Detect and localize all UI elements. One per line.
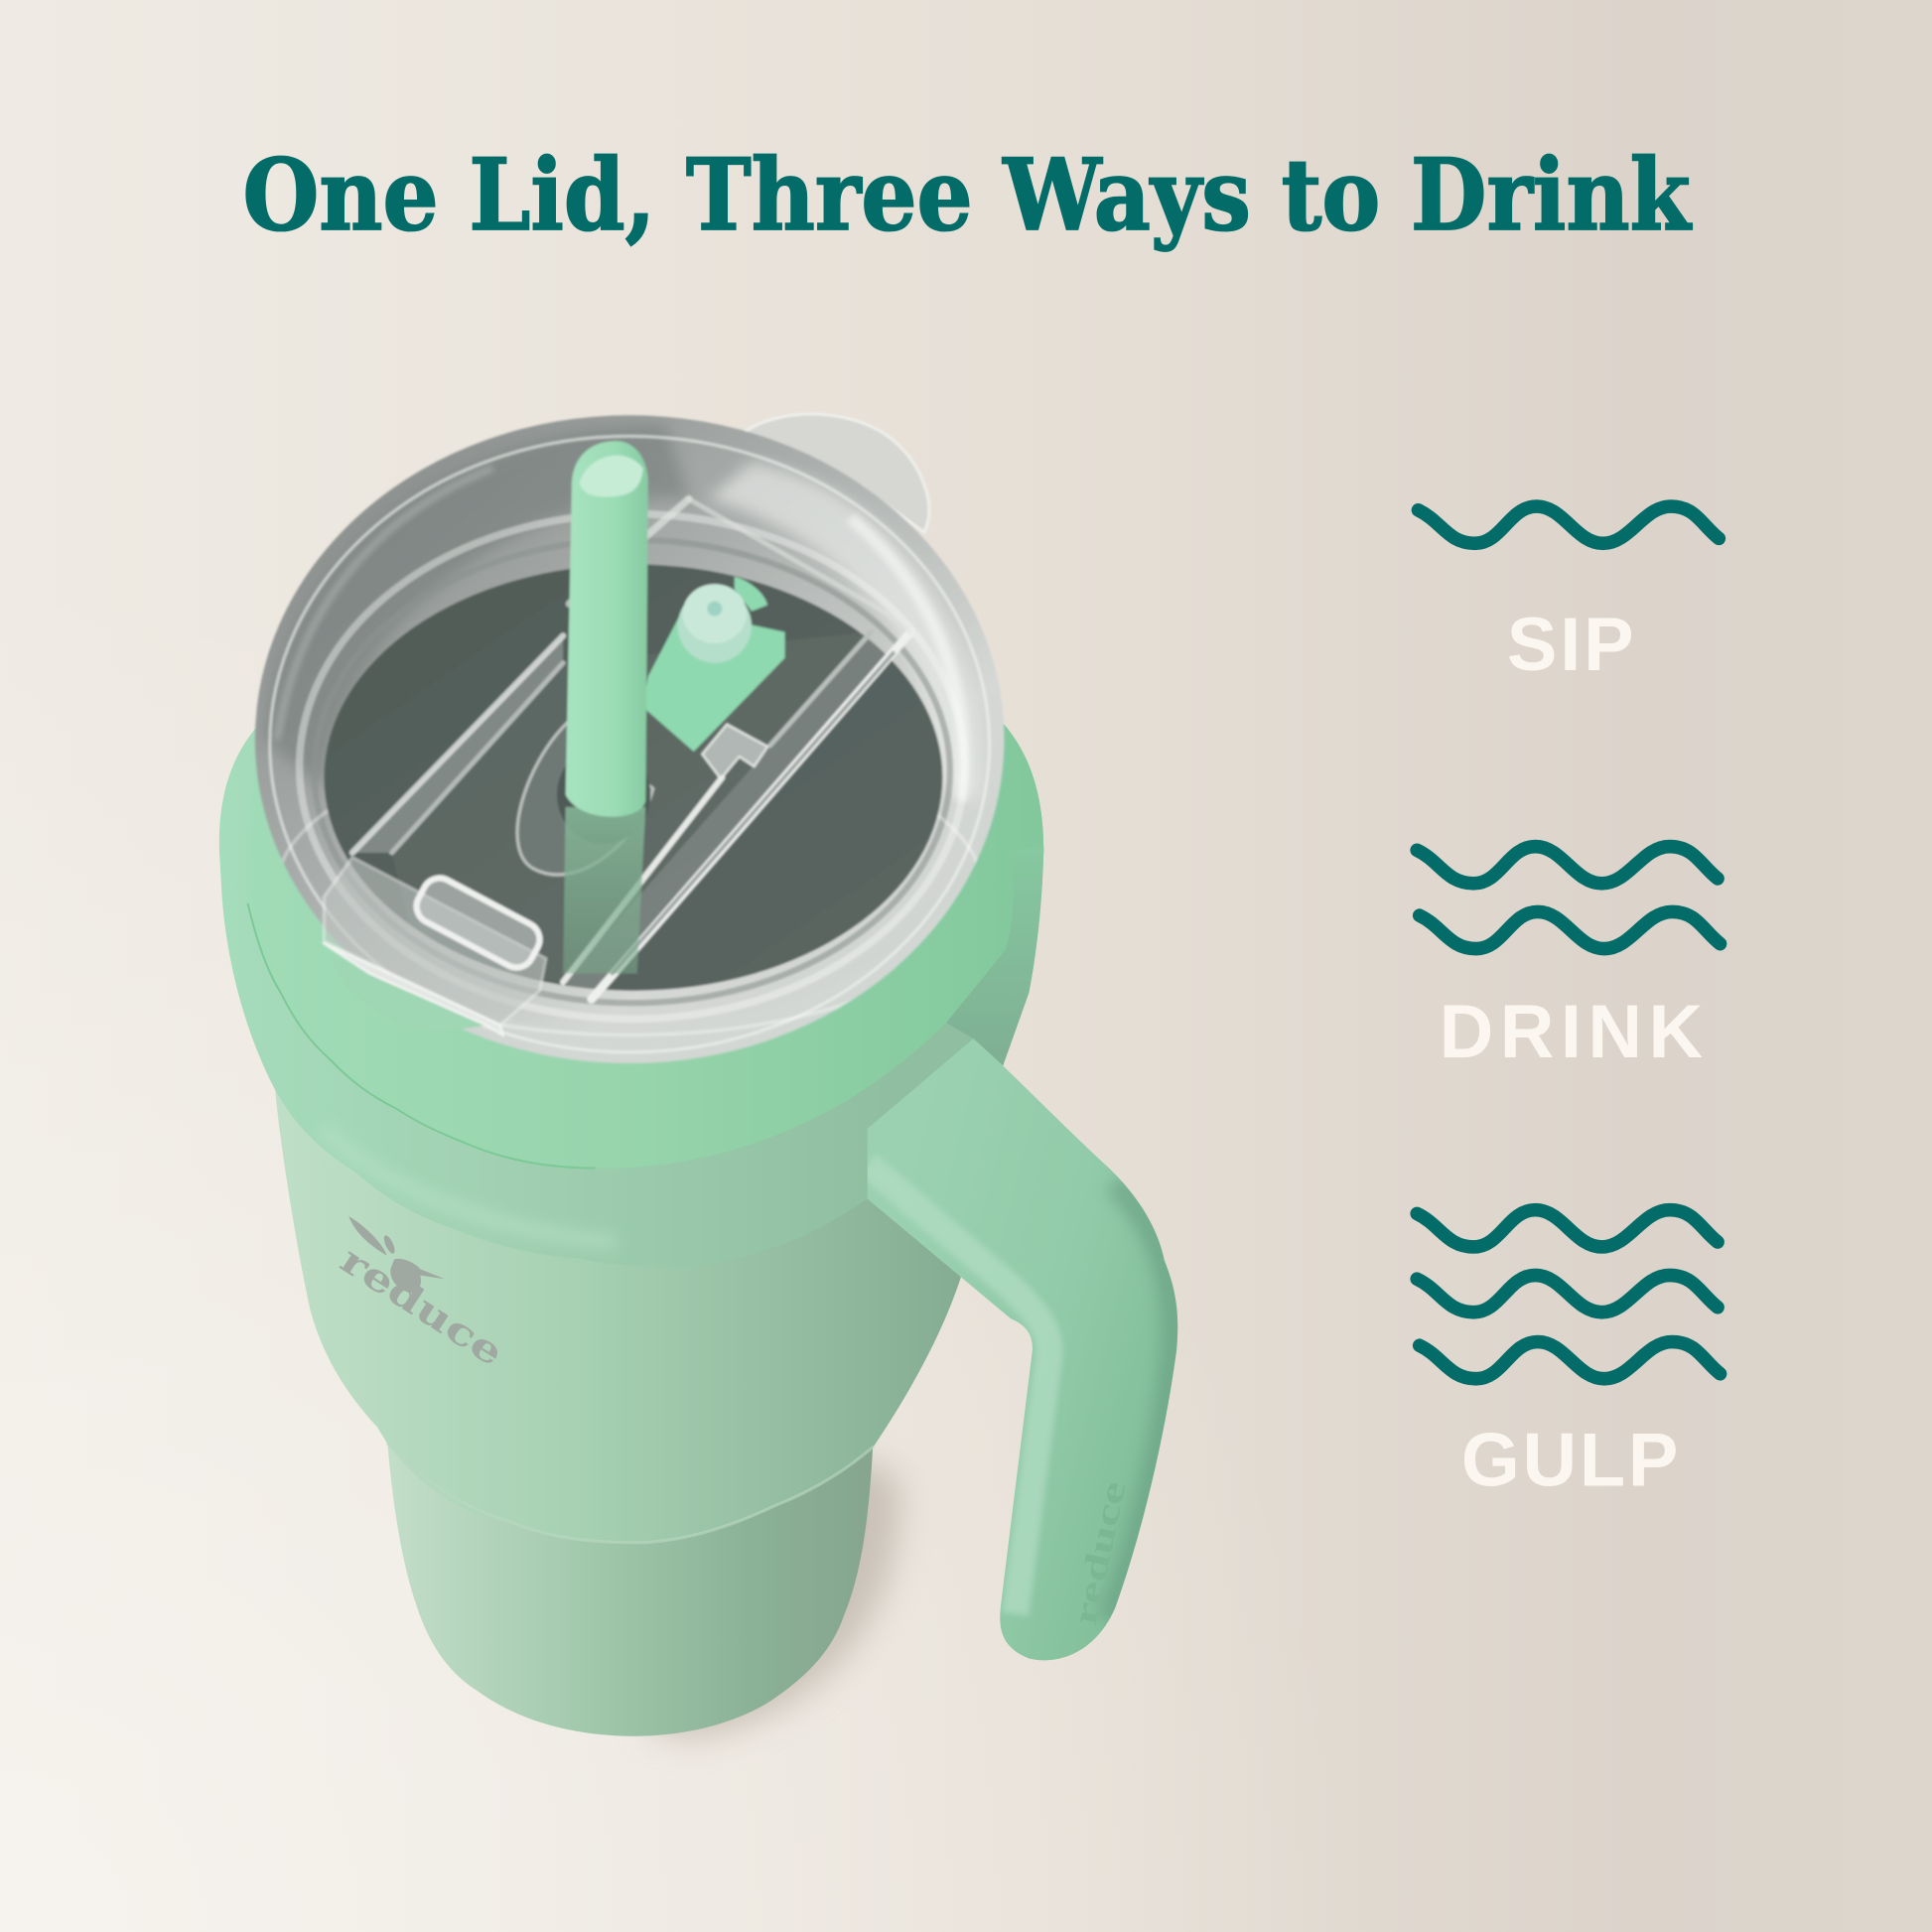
gulp level [1417,1210,1721,1503]
latch pad [410,872,546,974]
slider rails [352,499,910,1000]
collar right shaded side [946,845,1043,1066]
middle cup body [275,1084,986,1543]
right rim light glass [709,462,980,801]
icon: one wave [1418,506,1719,543]
handle soft shading and highlights [868,1165,1173,1620]
green stopper block [643,577,785,752]
label: SIP: SIP [1507,603,1634,687]
cast shadow [640,1453,899,1739]
label: GULP: GULP [1461,1419,1678,1503]
logo wordmark: reduce [333,1237,511,1375]
reduce logo on body [333,1216,511,1375]
straw below lid reflection [563,807,645,973]
rim clasp [323,942,502,1035]
hummingbird mark [348,1216,445,1293]
front lid latch [323,858,546,1035]
handle embossed wordmark: reduce [1065,1478,1134,1628]
straw opening [517,721,653,875]
drink level [1417,847,1721,1074]
lid tab [746,414,929,532]
outer curve shadow [1109,1182,1173,1620]
band light highlight [323,1128,617,1242]
upper collar [246,725,1043,1169]
lid collar band and outer silhouette [219,725,1043,1267]
green crescent through glass [331,955,486,1033]
straw [566,441,648,817]
handle [868,1038,1177,1660]
rim glare [850,517,963,801]
sip level [1418,506,1719,687]
rim rings [270,436,990,1052]
right rail glass [566,639,886,989]
left rail glass [352,635,563,853]
lid outer rim [255,415,1004,1063]
sliding channel [395,634,861,956]
inner edge highlight [868,1165,1049,1614]
icon: two waves [1417,847,1721,949]
title: One Lid, Three Ways to Drink [242,138,1693,253]
lower rim glass [469,1029,479,1034]
lower cup step line [387,1443,874,1543]
collar separator line [247,903,595,1169]
tumbler illustration [219,414,1177,1739]
icon: three waves [1417,1210,1721,1379]
lower cup body [387,1430,874,1736]
slider latch [702,725,767,778]
stopper tail [735,577,767,612]
dark interior window [324,564,942,991]
stopper plug [678,589,752,663]
clear lid [255,414,1011,1109]
upper left dark glass [265,425,690,788]
label: DRINK: DRINK [1440,990,1703,1074]
